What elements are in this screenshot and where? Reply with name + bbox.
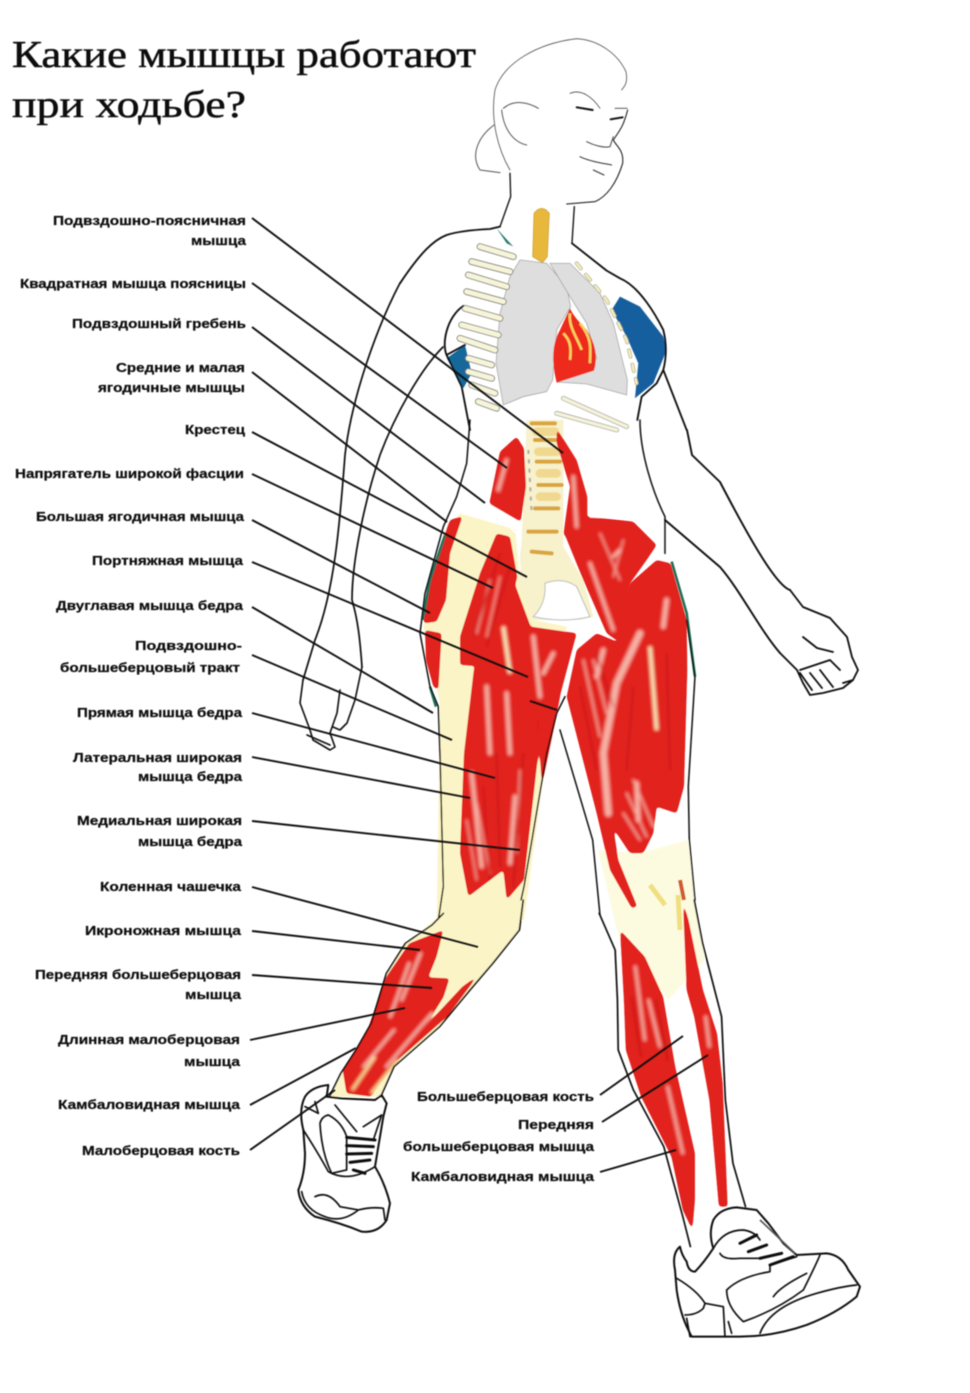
labels: left column: Длинная малоберцовая: [58, 1032, 240, 1047]
labels: left column: Подвздошный гребень: [72, 316, 246, 331]
right shoe: [674, 1207, 860, 1337]
labels: left column: [15, 213, 247, 1158]
labels: left column: Передняя большеберцовая: [35, 967, 241, 982]
labels: left column: Камбаловидная мышца: [58, 1097, 241, 1112]
labels: left column: Подвздошно-: [135, 638, 242, 653]
calf muscles left: [343, 930, 478, 1097]
labels: right column: Большеберцовая кость: [417, 1089, 594, 1104]
labels: left column: Двуглавая мышца бедра: [56, 598, 244, 613]
hips and thighs: [420, 420, 695, 920]
labels: left column: Медиальная широкая: [77, 813, 242, 828]
labels: left column: Крестец: [185, 422, 245, 437]
labels: left column: мышца: [191, 233, 247, 248]
right thigh: [567, 560, 687, 908]
shin muscles right: [620, 900, 728, 1230]
labels: right column: большеберцовая мышца: [403, 1139, 595, 1154]
lungs: [496, 260, 627, 405]
labels: right column: Передняя: [518, 1117, 594, 1132]
labels: left column: мышца бедра: [138, 769, 243, 784]
labels: left column: Квадратная мышца поясницы: [20, 276, 246, 291]
labels: left column: мышца: [184, 1054, 241, 1069]
psoas and iliacus: [489, 428, 657, 642]
callout lines: [250, 218, 708, 1172]
lower leg skin: [329, 900, 523, 1097]
labels: left column: Малоберцовая кость: [82, 1143, 240, 1158]
head and upper torso: [400, 39, 687, 430]
labels: left column: Прямая мышца бедра: [77, 705, 243, 720]
heart: [553, 308, 596, 383]
labels: left column: Подвздошно-поясничная: [53, 213, 246, 228]
labels: left column: Портняжная мышца: [92, 553, 244, 568]
left hand: [300, 667, 362, 750]
spine and pelvis: [517, 420, 593, 620]
right hand: [780, 590, 858, 695]
labels: left column: Коленная чашечка: [100, 879, 242, 894]
labels: left column: Средние и малая: [116, 360, 245, 375]
lower legs: [329, 900, 746, 1247]
chest blue: [447, 228, 667, 398]
labels: left column: ягодичные мышцы: [98, 380, 245, 395]
pelvis white edge: [467, 508, 658, 637]
labels: left column: большеберцовый тракт: [60, 660, 240, 675]
labels: left column: мышца бедра: [138, 834, 243, 849]
labels: left column: мышца: [185, 987, 242, 1002]
neck: [500, 173, 574, 243]
labels: right column: Камбаловидная мышца: [411, 1169, 595, 1184]
figure: walking woman anatomy: [298, 39, 860, 1337]
labels: left column: Напрягатель широкой фасции: [15, 466, 244, 481]
left arm: [303, 283, 443, 680]
right arm: [665, 430, 790, 653]
head outline: [476, 39, 628, 204]
labels: left column: Большая ягодичная мышца: [36, 509, 245, 524]
thigh base colour: [423, 513, 567, 920]
ribs: [460, 247, 637, 430]
labels: left column: Икроножная мышца: [85, 923, 242, 938]
labels: right column: [403, 1089, 595, 1184]
right knee: [598, 840, 705, 1000]
title: [12, 34, 476, 126]
arms: [300, 283, 858, 750]
left shoe: [298, 1085, 390, 1232]
torso and arm contours: [400, 227, 687, 430]
title: при ходьбе?: [12, 84, 246, 126]
leg contours: [420, 420, 695, 920]
lower leg contours: [329, 900, 746, 1247]
left outer thigh: [423, 516, 577, 900]
hip green edges: [423, 535, 695, 707]
title: Какие мышцы работают: [12, 34, 476, 76]
trachea: [533, 208, 549, 263]
labels: left column: Латеральная широкая: [73, 750, 242, 765]
